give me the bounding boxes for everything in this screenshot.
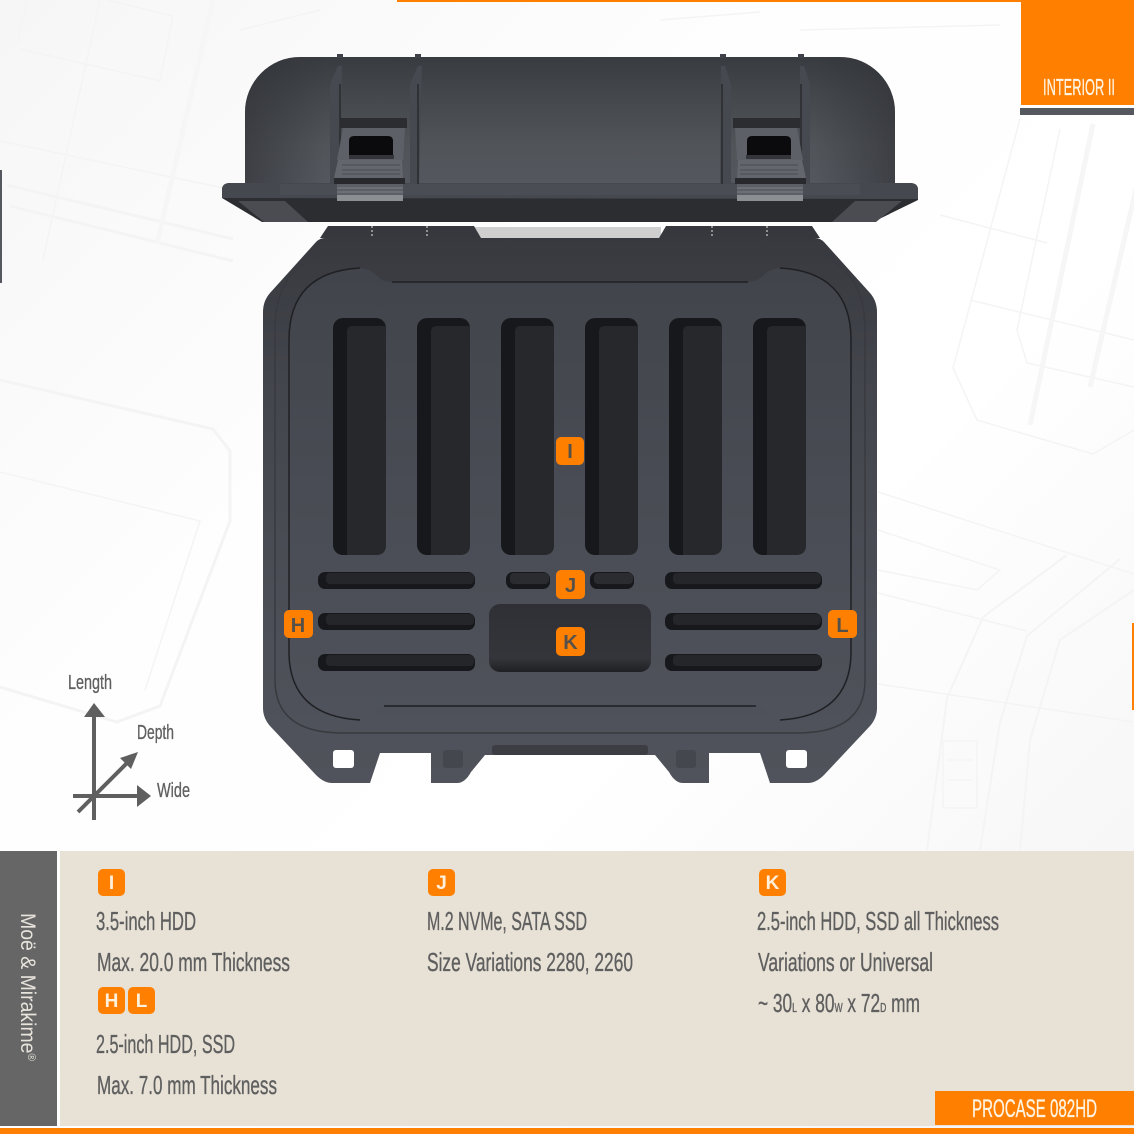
case base xyxy=(263,238,877,783)
2.5-inch slots L xyxy=(665,572,822,671)
universal compartment K xyxy=(489,604,651,672)
specification panel xyxy=(60,851,1134,1126)
badge J: J xyxy=(565,575,576,597)
text: 3.5-inch HDD: 3.5-inch HDD xyxy=(96,906,196,936)
badge J xyxy=(556,570,585,599)
axis arrows xyxy=(73,703,151,820)
mounting holes xyxy=(333,750,807,768)
case lid xyxy=(222,57,918,222)
legend badge L: L xyxy=(136,991,148,1012)
badge L: L xyxy=(836,615,849,637)
lid straps xyxy=(330,54,810,184)
bottom accent bar xyxy=(0,1128,1134,1134)
section tab: interior II xyxy=(1020,0,1134,115)
badge K: K xyxy=(563,632,578,654)
hinge xyxy=(320,226,820,238)
wide label: Wide xyxy=(157,780,190,802)
brand side panel: Moë & Mirakime xyxy=(16,913,39,1065)
blueprint background lines xyxy=(0,0,1134,850)
text: dimensions: ~ 30L x 80W x 72D mm xyxy=(758,988,920,1018)
badge H: H xyxy=(291,615,305,637)
legend badge J xyxy=(428,869,455,896)
legend badge I: I xyxy=(109,873,114,894)
right edge marker xyxy=(1132,623,1134,710)
text: 2.5-inch HDD, SSD: 2.5-inch HDD, SSD xyxy=(96,1029,235,1059)
legend badge K: K xyxy=(766,873,780,894)
legend badge H: H xyxy=(105,991,118,1012)
text: all thickness: 2.5-inch HDD, SSD all Thickness xyxy=(757,906,999,936)
M.2 slots J xyxy=(506,572,634,589)
badge H xyxy=(284,610,313,638)
legend badge H xyxy=(98,987,125,1014)
column: slot K xyxy=(757,869,999,1018)
text: M.2 NVMe: M.2 NVMe, SATA SSD xyxy=(427,906,587,936)
left latch xyxy=(334,118,407,201)
base grip detail xyxy=(492,745,648,755)
right latch xyxy=(733,118,806,201)
top accent line xyxy=(397,0,1021,2)
depth label: Depth xyxy=(137,722,174,744)
legend badge L xyxy=(128,987,155,1014)
column: slots I and H/L xyxy=(96,869,290,1100)
left edge marker xyxy=(0,170,2,283)
column: slot J xyxy=(427,869,633,977)
brand side panel xyxy=(0,851,57,1126)
model tag xyxy=(935,1091,1134,1125)
badge L xyxy=(828,610,857,638)
open case illustration xyxy=(222,54,918,783)
text: max 20 mm: Max. 20.0 mm Thickness xyxy=(97,947,290,977)
legend badge I xyxy=(98,869,125,896)
badge I xyxy=(556,437,584,465)
legend badge J: J xyxy=(436,873,447,894)
text: size variations: Size Variations 2280, 2260 xyxy=(427,947,633,977)
badge K xyxy=(556,627,585,656)
3.5-inch slots I xyxy=(333,318,806,555)
badge I: I xyxy=(567,441,573,463)
axis diagram xyxy=(68,672,190,820)
2.5-inch slots H xyxy=(318,572,475,671)
text: variations or universal: Variations or Universal xyxy=(758,947,933,977)
foam insert xyxy=(275,250,865,733)
legend badge K xyxy=(759,869,786,896)
brand side panel: ® xyxy=(25,1053,37,1061)
length label: Length xyxy=(68,672,112,694)
text: max 7 mm: Max. 7.0 mm Thickness xyxy=(97,1070,277,1100)
